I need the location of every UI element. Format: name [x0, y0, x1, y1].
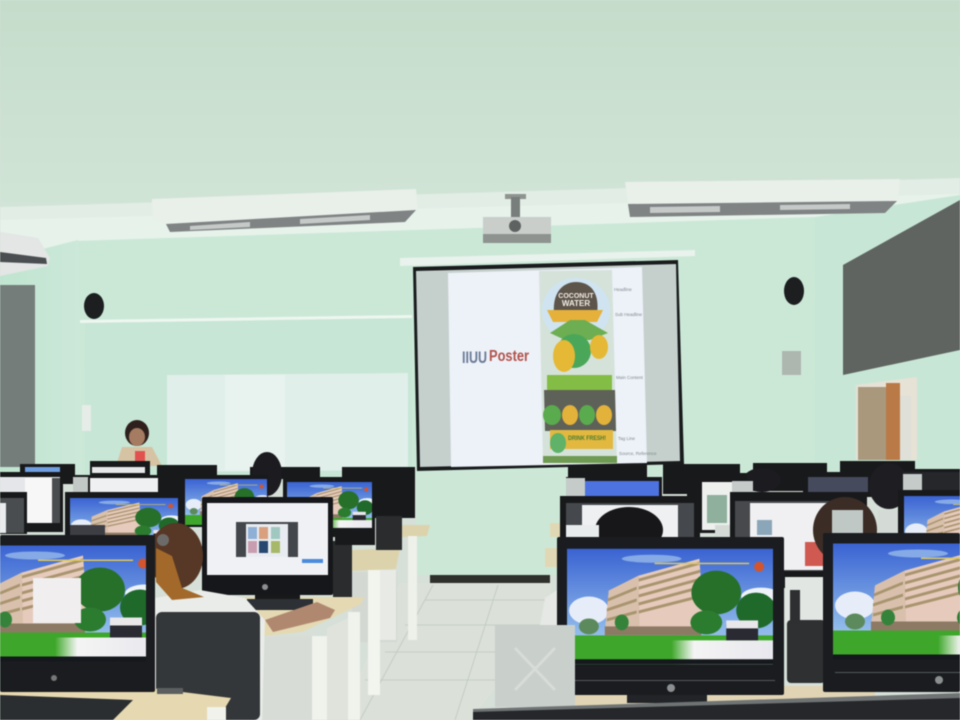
coconut water poster: WATER	[562, 299, 590, 308]
slide title	[462, 348, 529, 367]
poster part labels: Main Content	[616, 375, 644, 380]
left wall with curtain and air conditioner	[0, 232, 91, 480]
poster part labels: Tag Line	[618, 436, 636, 441]
right wall with curtain and door	[782, 195, 960, 480]
front left monitor	[0, 535, 231, 720]
speaker left	[84, 293, 104, 319]
far back row of monitors	[157, 461, 960, 518]
ceiling light left	[152, 189, 418, 232]
right desk strip	[575, 686, 875, 708]
coconut water poster: DRINK FRESH!	[568, 436, 606, 442]
back right monitors	[566, 463, 960, 538]
floor	[340, 583, 552, 720]
person behind back monitors	[252, 452, 282, 496]
front desk and wall below screen	[416, 472, 568, 583]
presenter	[116, 420, 162, 466]
nearest monitor top edge	[473, 693, 960, 720]
paper sheet taped to monitor	[495, 625, 575, 707]
speaker right	[784, 277, 804, 305]
slide title: Poster	[489, 348, 529, 365]
whiteboard	[167, 373, 408, 472]
back left monitors	[0, 461, 160, 534]
back wall	[75, 217, 815, 480]
student with ponytail	[149, 523, 335, 720]
ceiling	[0, 0, 960, 270]
poster part labels	[614, 287, 657, 456]
chair back	[156, 612, 260, 720]
second row right monitors	[560, 490, 960, 588]
seated students behind right monitors	[540, 577, 825, 683]
poster part labels: Sub Headline	[615, 312, 643, 317]
coconut water poster: COCONUT	[558, 293, 594, 300]
monitor row with wallpapers	[65, 475, 375, 550]
coconut water poster	[539, 270, 617, 463]
front center monitor	[557, 537, 784, 703]
projector	[483, 194, 551, 243]
ceiling light right	[625, 179, 900, 217]
center left monitor with web page	[202, 497, 333, 610]
slide title: IIUU	[462, 348, 487, 367]
poster part labels: Source, Reference	[619, 451, 657, 456]
desk edges behind right monitors	[545, 523, 560, 567]
left desks	[240, 516, 430, 720]
front right monitor	[823, 533, 960, 692]
projection screen	[413, 260, 684, 471]
poster part labels: Headline	[614, 287, 632, 292]
